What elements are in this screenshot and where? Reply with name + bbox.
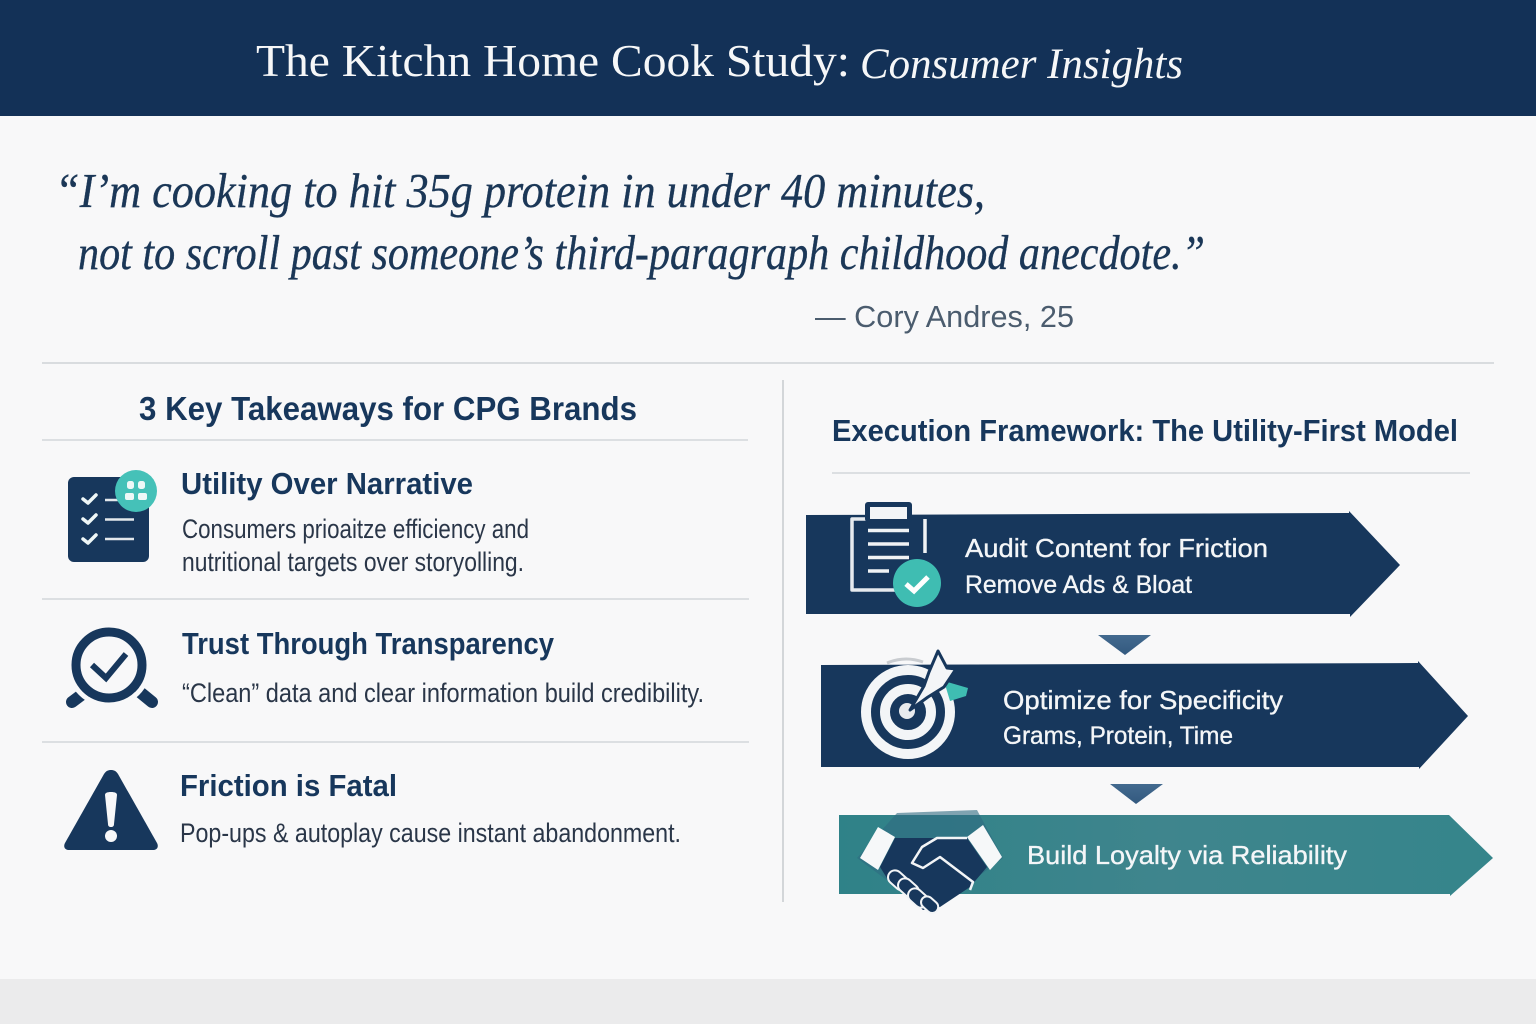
icon: clipboard with check [852, 502, 941, 607]
arrow: down 1 [1098, 635, 1151, 655]
pull quote [55, 163, 1205, 280]
takeaway 3: friction is fatal [64, 768, 681, 850]
panel: execution framework [806, 413, 1493, 915]
takeaway 1: utility over narrative [68, 466, 529, 577]
icon: handshake [857, 810, 1003, 915]
takeaway body: “Clean” data and clear information build credibility. [182, 678, 704, 708]
takeaways heading: 3 Key Takeaways for CPG Brands [139, 390, 637, 427]
title: Consumer Insights [860, 41, 1183, 88]
step text: Build Loyalty via Reliability [1027, 840, 1347, 870]
framework heading: Execution Framework: The Utility-First Model [832, 413, 1458, 448]
takeaway heading: Trust Through Transparency [182, 626, 555, 661]
arrow banner [839, 815, 1493, 896]
pull quote: “I’m cooking to hit 35g protein in under 40 minutes, [55, 163, 985, 218]
takeaway heading: Utility Over Narrative [181, 466, 473, 501]
pull quote: not to scroll past someone’s third-paragraph childhood anecdote.” [78, 225, 1205, 280]
step text: Grams, Protein, Time [1003, 722, 1233, 750]
takeaway body: nutritional targets over storyolling. [182, 547, 524, 577]
icon: checklist [68, 470, 157, 562]
step text: Remove Ads & Bloat [965, 571, 1192, 599]
quote attribution: — Cory Andres, 25 [815, 299, 1074, 334]
takeaway body: Pop-ups & autoplay cause instant abandonment. [180, 818, 681, 848]
step 1: audit content [806, 502, 1400, 617]
step text: Audit Content for Friction [965, 533, 1268, 563]
icon: warning triangle [64, 770, 158, 850]
icon: magnifier with check [69, 625, 152, 705]
step 2: optimize [821, 651, 1468, 769]
step text [965, 533, 1268, 599]
icon: target with arrow [866, 651, 968, 754]
takeaway heading: Friction is Fatal [180, 768, 397, 803]
arrow: down 2 [1110, 784, 1163, 804]
step 3: build loyalty [839, 810, 1493, 915]
takeaway 2: trust through transparency [69, 625, 704, 708]
arrow banner [821, 661, 1468, 769]
takeaway body: Consumers prioaitze efficiency and [182, 514, 529, 544]
step text: Optimize for Specificity [1003, 685, 1283, 715]
title: The Kitchn Home Cook Study: [256, 35, 850, 86]
panel: key takeaways [42, 390, 749, 850]
step text [1003, 685, 1283, 750]
takeaway body [182, 514, 529, 577]
header banner [0, 0, 1536, 116]
arrow banner [806, 511, 1400, 617]
